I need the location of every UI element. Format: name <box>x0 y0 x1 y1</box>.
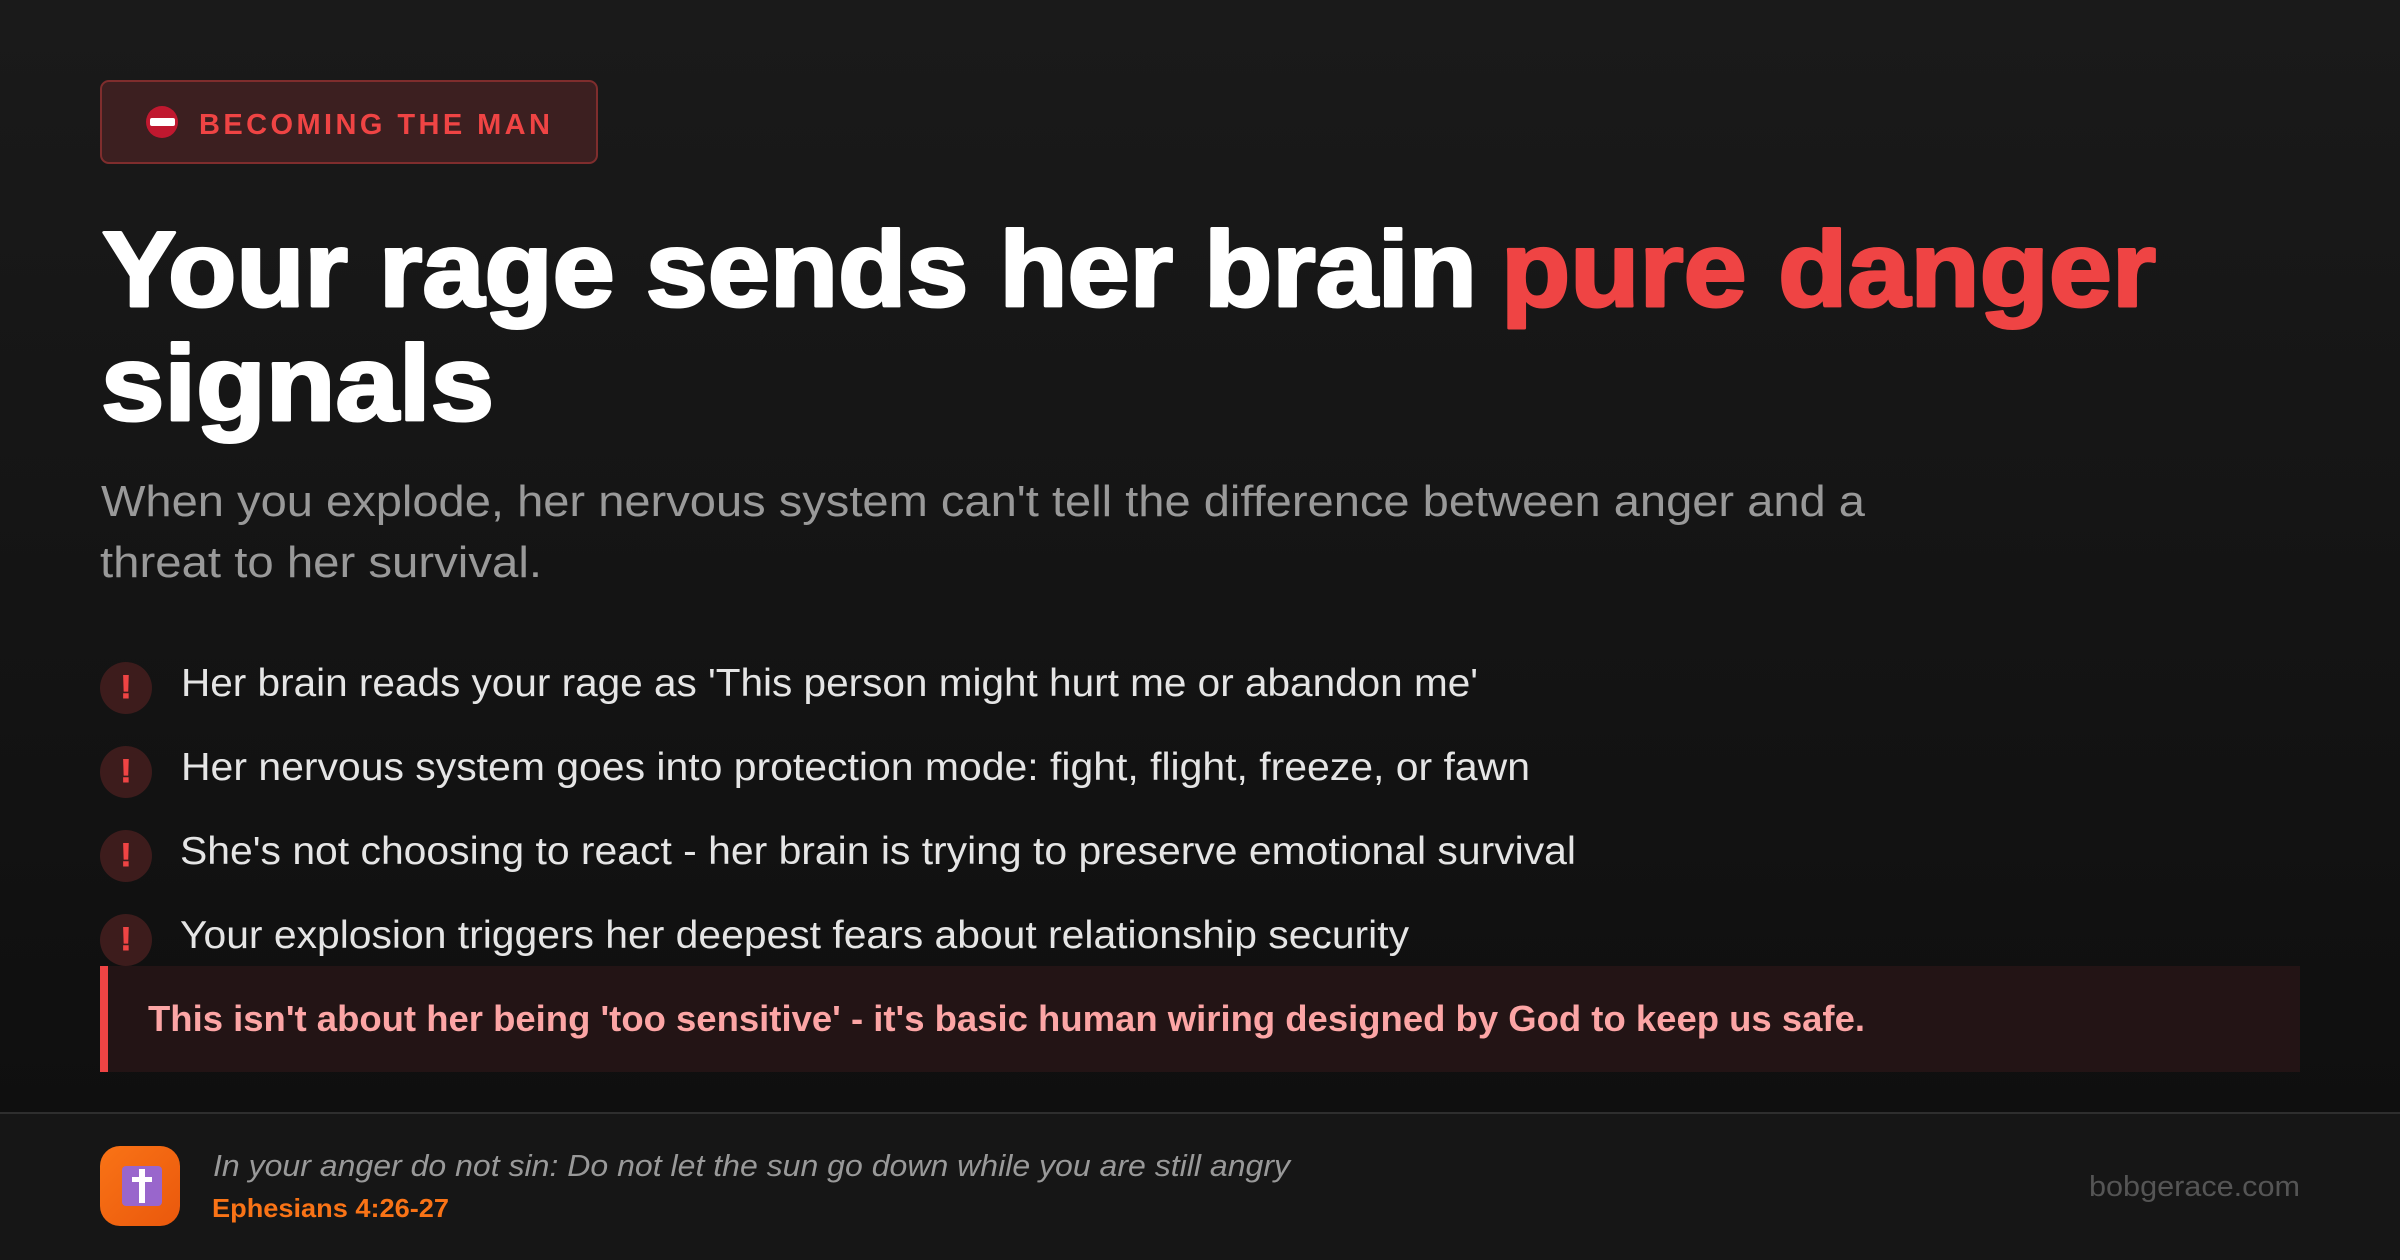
icon: no entry <box>146 106 178 138</box>
badge label: BECOMING THE MAN <box>199 109 550 141</box>
callout text: This isn't about her being 'too sensitive' - it's basic human wiring designed by God to keep us safe. <box>148 998 1865 1039</box>
bullet 4: ! <box>121 921 131 957</box>
scripture reference: Ephesians 4:26-27 <box>212 1193 449 1223</box>
bullet 4: Your explosion triggers her deepest fears about relationship security <box>180 914 1410 957</box>
callout <box>100 966 2300 1072</box>
badge: becoming the man <box>101 81 597 163</box>
bullet list <box>100 662 1576 966</box>
bullet 2: Her nervous system goes into protection mode: fight, flight, freeze, or fawn <box>181 746 1530 789</box>
scripture quote: In your anger do not sin: Do not let the sun go down while you are still angry <box>213 1148 1293 1183</box>
footer <box>0 1112 2400 1260</box>
icon: cross <box>100 1146 180 1226</box>
site url: bobgerace.com <box>2089 1171 2300 1203</box>
subtitle: threat to her survival. <box>100 538 542 587</box>
bullet 1: Her brain reads your rage as 'This person might hurt me or abandon me' <box>181 662 1478 705</box>
bullet 3: ! <box>121 837 131 873</box>
title <box>101 209 2156 443</box>
title line 1: Your rage sends her brain <box>102 209 1477 329</box>
subtitle <box>100 477 1866 587</box>
title highlight: pure danger <box>1501 209 2156 329</box>
title line 2: signals <box>101 323 494 443</box>
bullet 2: ! <box>121 753 131 789</box>
bullet 1: ! <box>121 669 131 705</box>
bullet 3: She's not choosing to react - her brain is trying to preserve emotional survival <box>180 830 1576 873</box>
subtitle: When you explode, her nervous system can't tell the difference between anger and a <box>101 477 1866 526</box>
